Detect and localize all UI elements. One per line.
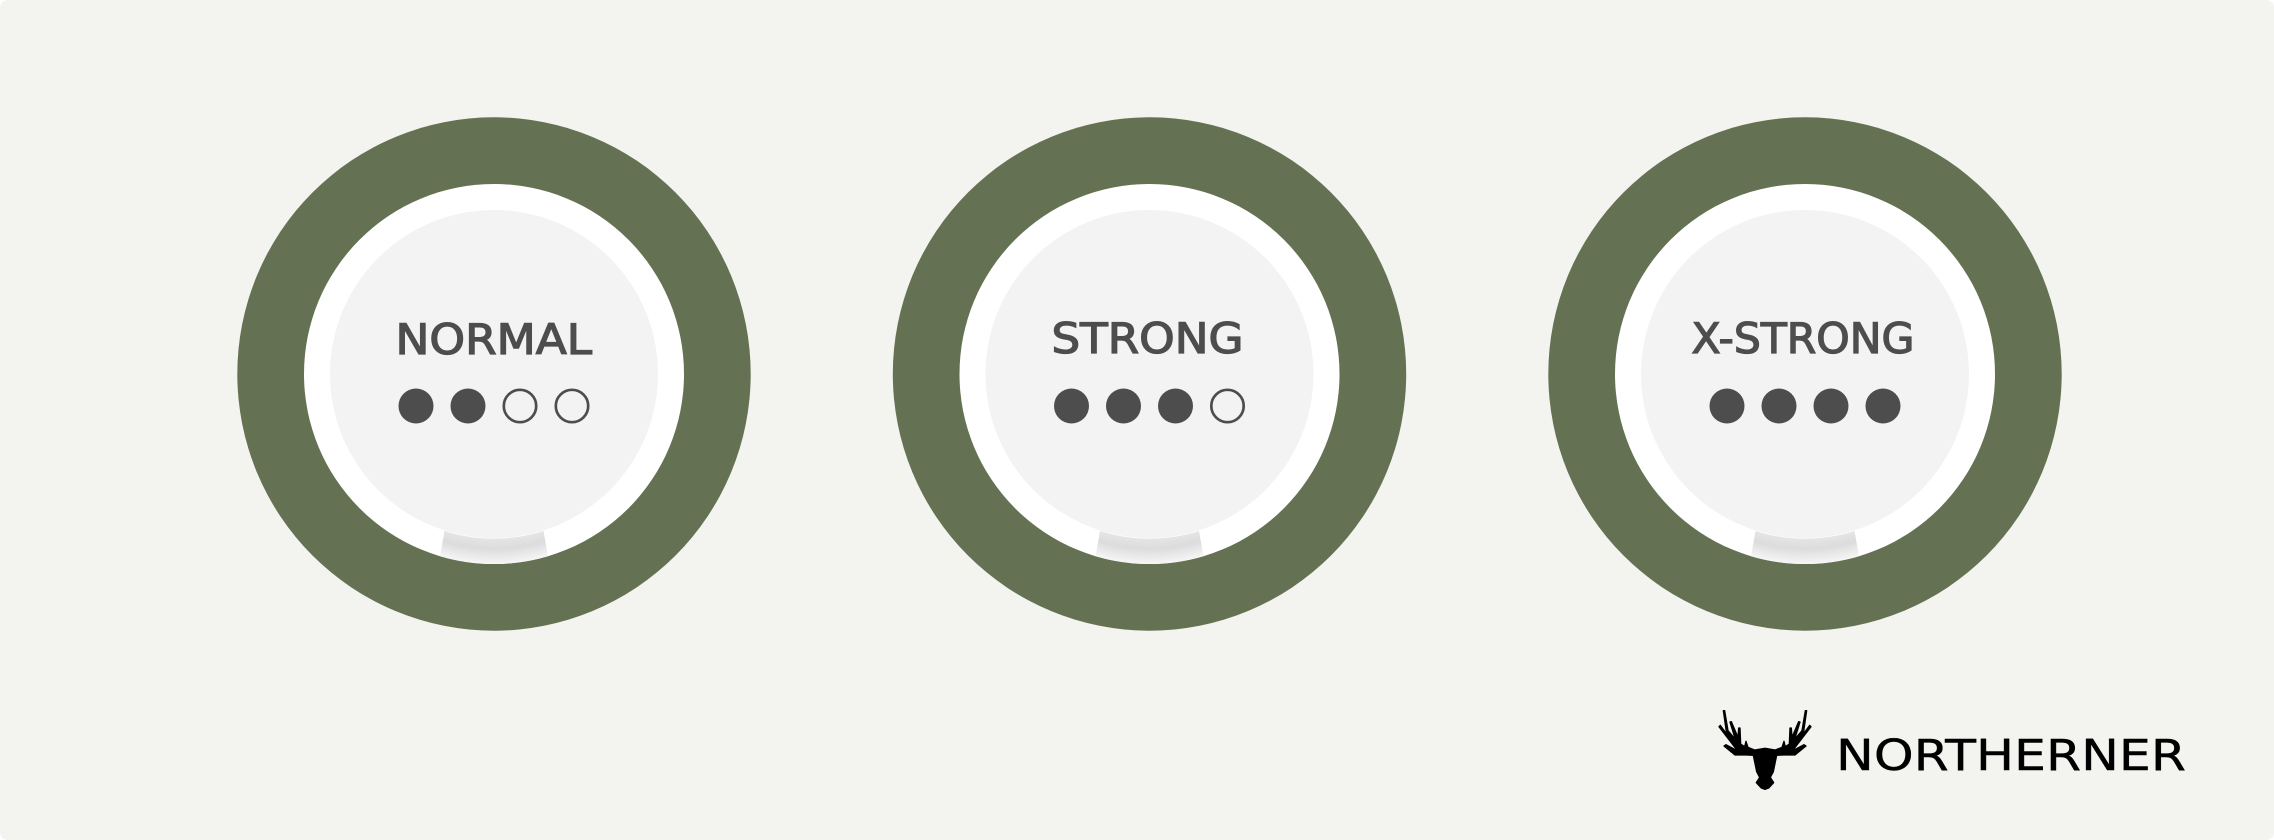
inner dial face — [986, 210, 1314, 538]
dial: x-strong — [1548, 117, 2062, 631]
inner dial face — [1641, 210, 1969, 538]
grey indicator segment — [440, 531, 548, 564]
label: strong: STRONG — [1052, 314, 1244, 363]
inner dial face — [330, 210, 658, 538]
strength dots: 3 of 4 — [1054, 388, 1244, 424]
label: normal: NORMAL — [396, 315, 593, 364]
white ring — [1615, 184, 1995, 564]
dial: strong — [893, 117, 1406, 631]
outer green ring — [893, 117, 1406, 631]
brand name: NORTHERNER — [1836, 732, 2186, 781]
icon: moose head logo — [1719, 711, 1811, 789]
dial: normal — [237, 117, 751, 631]
white ring — [960, 184, 1340, 564]
strength dots: 4 of 4 — [1710, 388, 1900, 424]
grey indicator segment — [1096, 531, 1204, 564]
strength dots: 2 of 4 — [398, 388, 588, 424]
label: x-strong: X-STRONG — [1692, 314, 1914, 363]
white ring — [304, 184, 684, 564]
outer green ring — [1548, 117, 2062, 631]
grey indicator segment — [1751, 531, 1859, 564]
outer green ring — [237, 117, 751, 631]
